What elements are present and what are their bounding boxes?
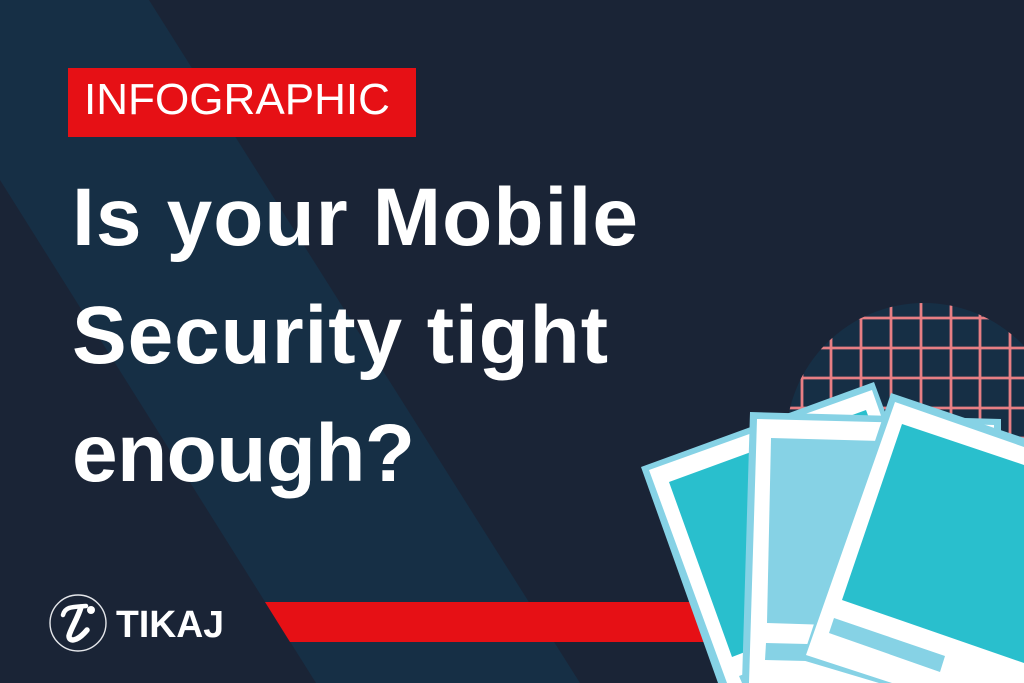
card caption bar <box>739 653 812 683</box>
logo wordmark: TIKAJ <box>116 604 224 646</box>
tag: infographic <box>68 68 416 137</box>
red bar <box>265 602 720 642</box>
tag: infographic: INFOGRAPHIC <box>84 75 390 124</box>
title: enough? <box>72 408 415 499</box>
card: middle <box>742 412 1001 683</box>
card: back left <box>641 382 985 683</box>
card caption bar <box>765 643 890 663</box>
diagonal band <box>0 0 580 683</box>
card caption bar <box>829 618 945 672</box>
title <box>72 172 638 499</box>
card: front right <box>802 393 1024 683</box>
grid circle <box>789 303 1024 438</box>
title: Is your Mobile <box>72 172 638 263</box>
title: Security tight <box>72 290 608 381</box>
icon: logo mark <box>50 595 106 651</box>
logo: Tikaj <box>50 595 224 651</box>
